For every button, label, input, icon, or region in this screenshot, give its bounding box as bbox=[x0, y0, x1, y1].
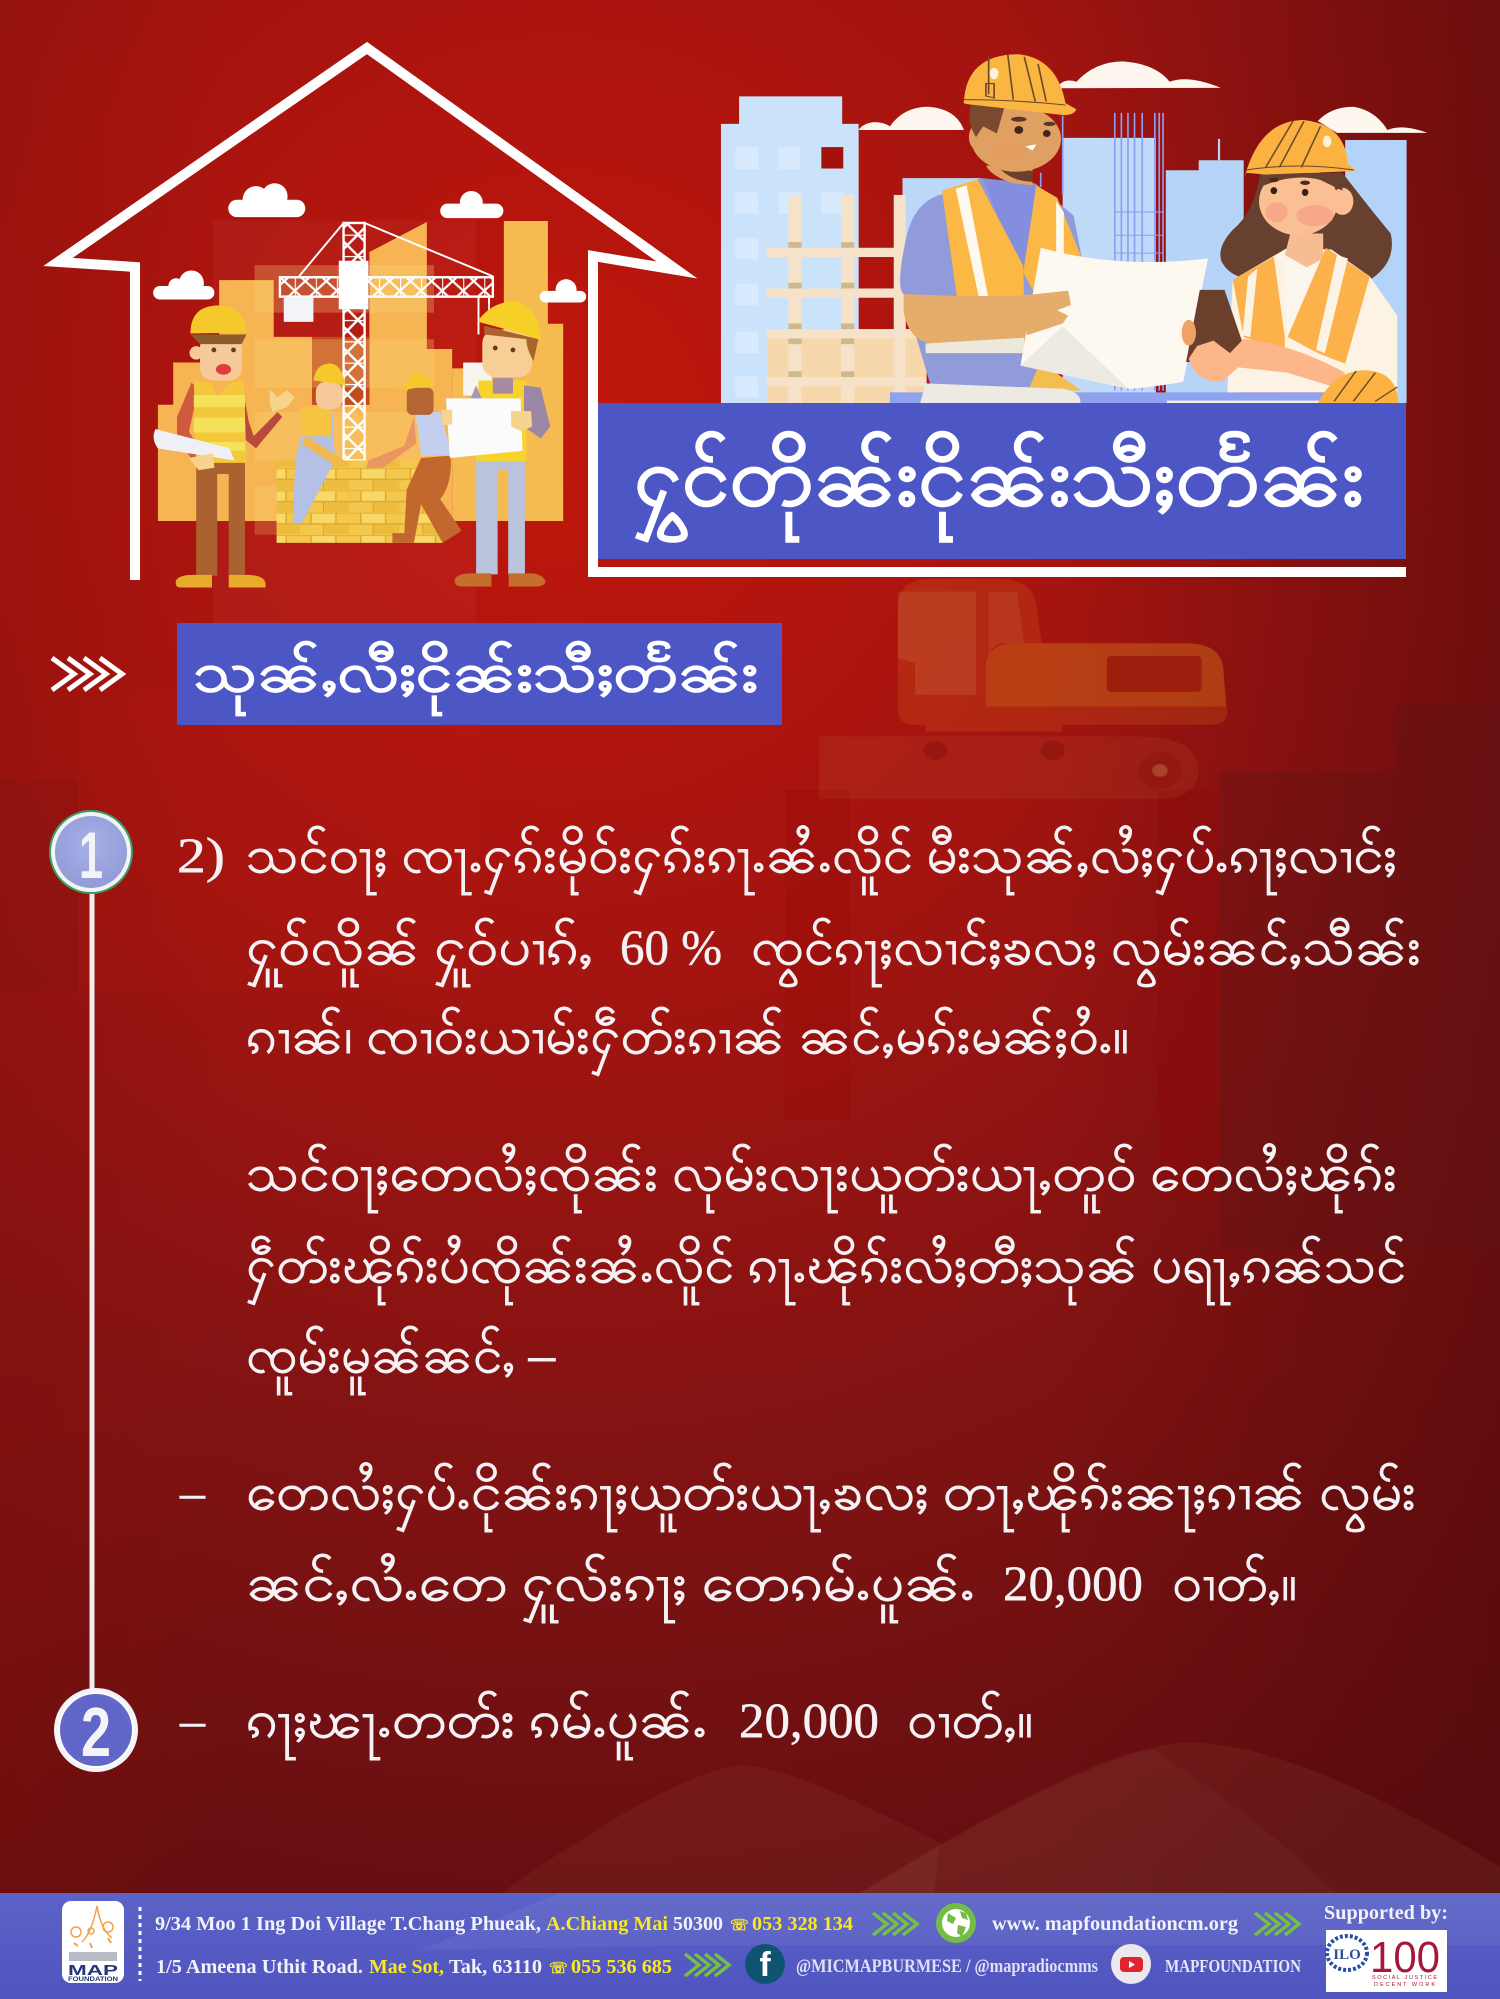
body text: – bbox=[179, 1692, 206, 1748]
body text: ဝၢတ်ႇ။ bbox=[907, 1691, 1033, 1749]
badge 1 bbox=[50, 811, 132, 893]
icon: globe bbox=[936, 1903, 976, 1943]
address row 1: 053 328 134 bbox=[752, 1913, 853, 1935]
address row 1: ☏ bbox=[730, 1918, 749, 1934]
icon: youtube bbox=[1111, 1944, 1151, 1984]
address row 2 bbox=[156, 1956, 672, 1978]
body text: တေလႆႈႁပ်ႉငိုၼ်းၵႃႈယူတ်းယႃႇၶလႈ တႃႇၽိုၵ်းၼႃႈၵၢၼ် လွမ်း bbox=[246, 1463, 1416, 1532]
title banner: ႁွင်တိုၼ်းငိုၼ်းသီႈတႅၼ်း bbox=[634, 429, 1364, 543]
skyline bbox=[158, 221, 563, 623]
icon: facebook bbox=[745, 1944, 785, 1984]
supported by: Supported by: bbox=[1324, 1902, 1448, 1924]
crane bbox=[280, 223, 493, 460]
icon: ILO 100 logo: 100 bbox=[1370, 1933, 1440, 1982]
icon: ILO 100 logo bbox=[1326, 1930, 1447, 1992]
badge 2 bbox=[54, 1688, 138, 1772]
badge 2: 2 bbox=[81, 1693, 111, 1771]
body text: 60 % bbox=[620, 919, 722, 975]
body text: ၸွင်ၵႃႈလၢင်ႈၶလႈ လွမ်းၼင်ႇသီၼ်း bbox=[751, 918, 1421, 987]
ghost mountains bbox=[491, 1743, 1500, 1900]
address row 2: Tak, 63110 bbox=[449, 1956, 542, 1978]
footer bbox=[0, 1893, 1500, 1999]
timeline connector bbox=[90, 892, 94, 1690]
icon: ILO 100 logo: DECENT WORK bbox=[1374, 1982, 1436, 1988]
body text: ၼင်ႇလႆႉတေ ႁူလ်းၵႃႈ တေၵမ်ႉပူၼ်ႉ bbox=[246, 1554, 975, 1623]
address row 2: 1/5 Ameena Uthit Road. bbox=[156, 1956, 363, 1978]
address row 2: Mae Sot, bbox=[369, 1956, 444, 1978]
address row 1: 50300 bbox=[673, 1913, 723, 1935]
worker: engineer with blueprint bbox=[441, 301, 550, 586]
body text: ၸူမ်းမူၼ်ၼင်ႇ – bbox=[246, 1326, 556, 1395]
rolled plans and table bbox=[890, 383, 1329, 403]
subheading banner bbox=[177, 623, 782, 725]
woman bbox=[1182, 120, 1398, 403]
illustration: engineers and city bbox=[721, 54, 1427, 403]
icon: ILO 100 logo: ILO bbox=[1333, 1947, 1361, 1963]
icon: MAP foundation logo: FOUNDATION bbox=[68, 1977, 118, 1983]
address row 1 bbox=[155, 1913, 853, 1935]
social handles: @MICMAPBURMESE / @mapradiocmms bbox=[796, 1956, 1098, 1977]
address row 1: A.Chiang Mai bbox=[546, 1913, 668, 1935]
worker: bending bricklayer bbox=[366, 373, 462, 543]
body text: ႁူဝ်လိူၼ် ႁူဝ်ပၢၵ်ႇ bbox=[246, 918, 593, 987]
body text: ၵႃႈၽႃႉတတ်း ၵမ်ႉပူၼ်ႉ bbox=[246, 1691, 707, 1760]
buildings bbox=[721, 96, 1407, 403]
body text: သင်ဝႃႈ ၸႃႉႁၵ်းမိုဝ်းႁၵ်းၵႃႉၼႆႉလိူင် မီးသုၼ်ႇလႆႈႁပ်ႉၵႃႈလၢင်ႈ bbox=[246, 826, 1397, 895]
body text: ႁဵတ်းၽိုၵ်းပႆၸိုၼ်းၼႆႉလိူင် ၵႃႉၽိုၵ်းလႆႈတီႈသုၼ် ပရႃႇၵၼ်သင် bbox=[246, 1236, 1406, 1305]
icon: MAP foundation logo: MAP bbox=[68, 1962, 118, 1979]
body text: ၵၢၼ်၊ ၸၢဝ်းယၢမ်းႁဵတ်းၵၢၼ် ၼင်ႇမၵ်းမၼ်ႈဝႆႉ။ bbox=[246, 1007, 1129, 1076]
dotted divider bbox=[138, 1907, 142, 1981]
body text: သင်ဝႃႈတေလႆႈၸိုၼ်း လုမ်းလႃးယူတ်းယႃႇတူဝ် တေလႆႈၽိုၵ်း bbox=[246, 1144, 1397, 1213]
icon: MAP foundation logo bbox=[62, 1901, 124, 1983]
green chevrons bbox=[685, 1913, 1299, 1976]
bricks bbox=[277, 460, 443, 543]
address row 1: 9/34 Moo 1 Ing Doi Village T.Chang Phueak, bbox=[155, 1913, 541, 1935]
body text: 2) bbox=[177, 827, 225, 883]
subheading chevrons bbox=[52, 658, 122, 690]
ghost city backdrop bbox=[0, 690, 1500, 1250]
website: www. mapfoundationcm.org bbox=[992, 1913, 1238, 1935]
youtube name: MAPFOUNDATION bbox=[1165, 1956, 1301, 1976]
subheading banner: သုၼ်ႇလီႈငိုၼ်းသီႈတႅၼ်း bbox=[193, 640, 758, 716]
body text: 20,000 bbox=[1003, 1555, 1143, 1611]
clouds bbox=[153, 183, 586, 302]
icon: ILO 100 logo: SOCIAL JUSTICE bbox=[1372, 1975, 1438, 1981]
body text: 20,000 bbox=[739, 1692, 879, 1748]
illustration: builders and crane bbox=[153, 183, 586, 623]
worker: foreman with rolls bbox=[154, 305, 294, 587]
badge 1: 1 bbox=[79, 818, 103, 892]
body text bbox=[177, 826, 1421, 1760]
address row 2: 055 536 685 bbox=[571, 1956, 672, 1978]
title banner bbox=[598, 403, 1406, 559]
icon: facebook: f bbox=[759, 1946, 771, 1984]
worker: kneeling bricklayer bbox=[293, 364, 345, 523]
clouds bbox=[859, 61, 1427, 133]
body text: ဝၢတ်ႇ။ bbox=[1172, 1554, 1297, 1612]
scaffolding bbox=[766, 195, 927, 403]
house outline bbox=[58, 48, 1406, 580]
ghost excavator bbox=[819, 579, 1227, 799]
blueprint bbox=[1019, 248, 1208, 389]
address row 2: ☏ bbox=[549, 1961, 568, 1977]
man bbox=[900, 54, 1082, 391]
body text: – bbox=[179, 1464, 206, 1520]
